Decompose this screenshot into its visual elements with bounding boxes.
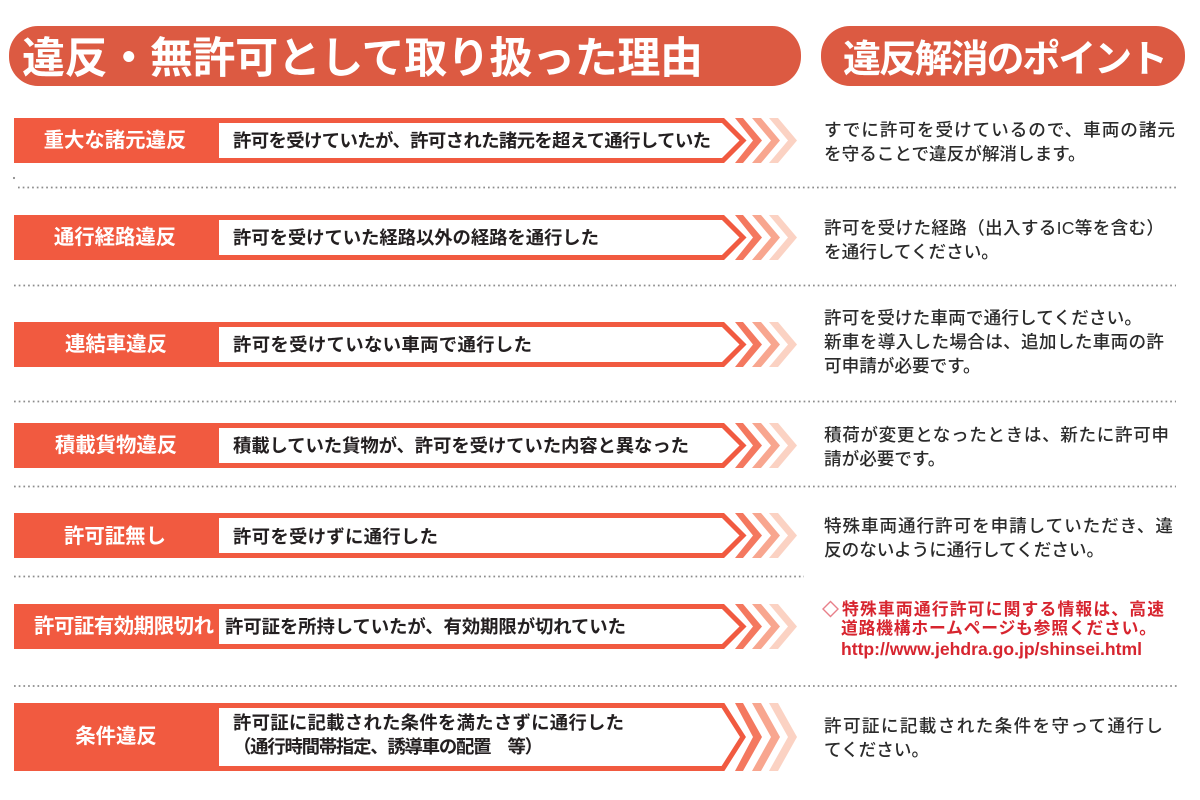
row 4: cargo violation xyxy=(14,423,797,468)
row 3: combination vehicle violation: 許可を受けていない車両で通行した xyxy=(233,334,532,355)
resolution text 5 xyxy=(824,516,1173,560)
resolution text 1: すでに許可を受けているので、車両の諸元 xyxy=(824,120,1175,140)
row 7: condition violation: 許可証に記載された条件を満たさずに通行した xyxy=(233,712,624,733)
resolution text 1 xyxy=(824,120,1175,164)
callout: highway organization website: 道路機構ホームページも参照ください。 xyxy=(841,619,1156,638)
row 5: no permit: 許可を受けずに通行した xyxy=(233,526,438,547)
resolution text 3: 新車を導入した場合は、追加した車両の許 xyxy=(824,332,1164,352)
resolution text 5: 特殊車両通行許可を申請していただき、違 xyxy=(824,516,1173,536)
row 3: combination vehicle violation: 連結車違反 xyxy=(65,332,167,356)
row 4: cargo violation: 積載貨物違反 xyxy=(55,433,177,457)
resolution text 7: てください。 xyxy=(824,740,929,760)
resolution text 4: 請が必要です。 xyxy=(824,449,945,469)
row 2: route violation: 許可を受けていた経路以外の経路を通行した xyxy=(233,227,599,248)
resolution text 3 xyxy=(824,308,1164,376)
heading: reasons for violation xyxy=(9,26,801,86)
row 4: cargo violation: 積載していた貨物が、許可を受けていた内容と異なった xyxy=(233,435,689,456)
resolution text 2: 許可を受けた経路（出入するIC等を含む） xyxy=(824,218,1164,238)
resolution text 7: 許可証に記載された条件を守って通行し xyxy=(824,716,1163,736)
callout: highway organization website: 特殊車両通行許可に関する情報は、高速 xyxy=(842,599,1164,619)
resolution text 2 xyxy=(824,218,1164,262)
heading: points for resolving violations xyxy=(821,26,1185,86)
row 2: route violation: 通行経路違反 xyxy=(54,226,176,249)
callout: highway organization website: http://www.jehdra.go.jp/shinsei.html xyxy=(841,639,1142,659)
resolution text 7 xyxy=(824,716,1163,760)
resolution text 4 xyxy=(824,425,1169,469)
heading: reasons for violation: 違反・無許可として取り扱った理由 xyxy=(22,35,703,83)
row 6: expired permit: 許可証有効期限切れ xyxy=(34,615,214,638)
row 7: condition violation: 条件違反 xyxy=(75,725,157,748)
resolution text 1: を守ることで違反が解消します。 xyxy=(824,144,1086,164)
resolution text 4: 積荷が変更となったときは、新たに許可申 xyxy=(824,425,1169,445)
row 6: expired permit xyxy=(14,604,797,649)
row 5: no permit: 許可証無し xyxy=(64,525,166,548)
row 6: expired permit: 許可証を所持していたが、有効期限が切れていた xyxy=(225,616,626,637)
resolution text 5: 反のないように通行してください。 xyxy=(824,540,1104,560)
callout: highway organization website xyxy=(823,599,1164,659)
row 7: condition violation: （通行時間帯指定、誘導車の配置 等） xyxy=(233,736,543,757)
resolution text 3: 許可を受けた車両で通行してください。 xyxy=(824,308,1142,328)
row 3: combination vehicle violation xyxy=(14,322,797,367)
row 2: route violation xyxy=(14,215,797,260)
heading: points for resolving violations: 違反解消のポイント xyxy=(843,39,1168,81)
row 1: serious dimension violation: 重大な諸元違反 xyxy=(44,129,186,152)
row 7: condition violation xyxy=(14,703,797,771)
row 1: serious dimension violation xyxy=(14,118,797,163)
resolution text 3: 可申請が必要です。 xyxy=(824,356,981,376)
resolution text 2: を通行してください。 xyxy=(824,242,999,262)
row 5: no permit xyxy=(14,513,797,558)
row 1: serious dimension violation: 許可を受けていたが、許可された諸元を超えて通行していた xyxy=(233,130,711,151)
